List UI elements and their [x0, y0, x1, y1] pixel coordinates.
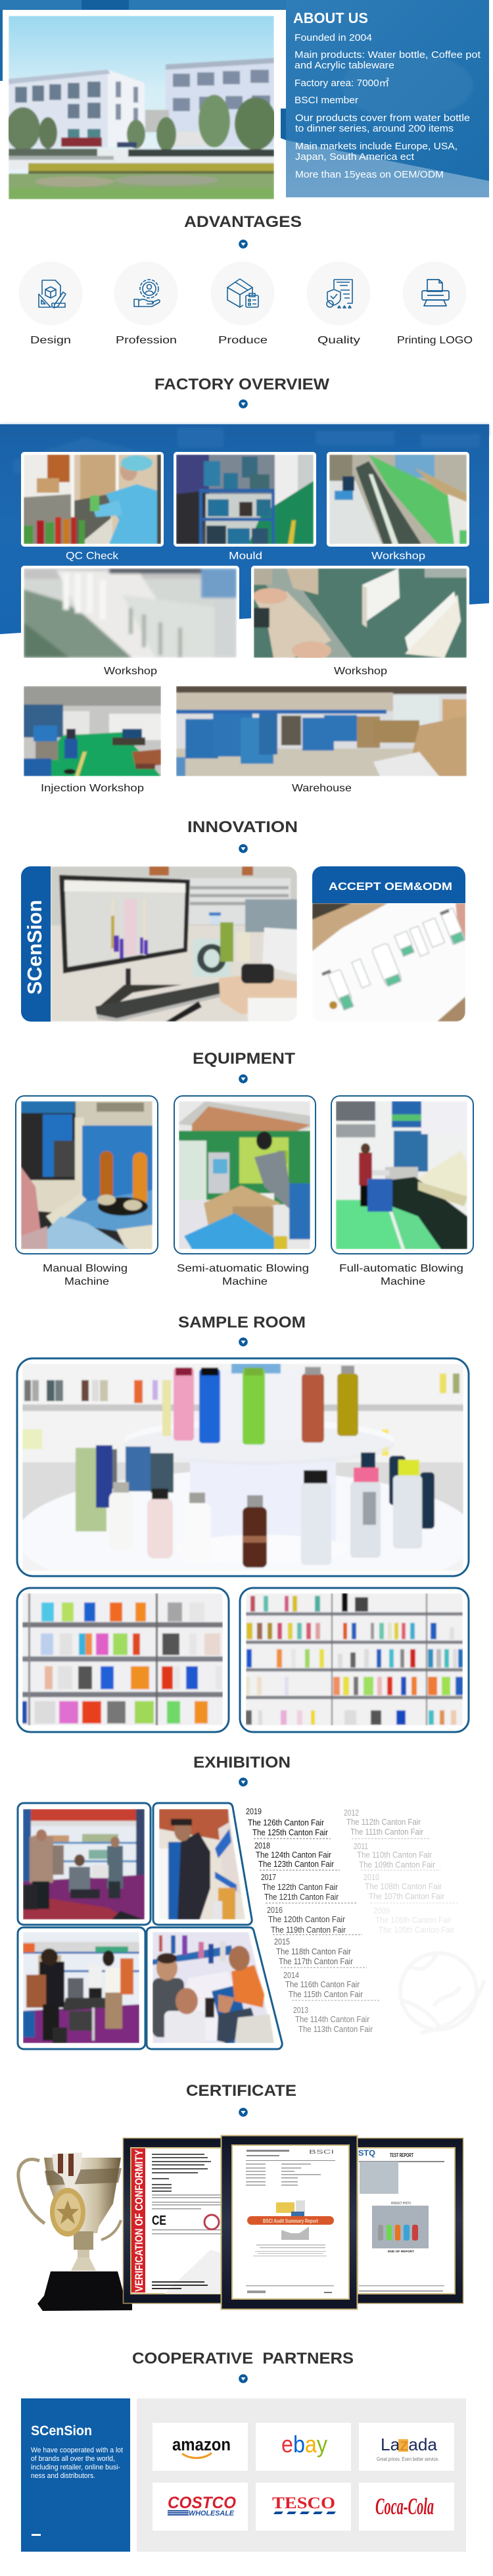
logo: amazon: amazon — [172, 2435, 231, 2454]
canton fair timeline: 2019 to 2013: The 121th Canton Fair — [264, 1892, 339, 1902]
label: qc check: QC Check — [66, 551, 119, 562]
label: semi-automatic blowing machine — [177, 1263, 309, 1287]
canton fair timeline: 2019 to 2013: 2013 — [293, 2005, 308, 2015]
section: exhibition — [18, 1754, 484, 2049]
canton fair timeline: 2019 to 2013: 2011 — [354, 1841, 368, 1851]
canton fair timeline: 2019 to 2013: The 115th Canton Fair — [289, 1989, 364, 1999]
label: full-automatic blowing machine: Machine — [381, 1276, 425, 1287]
equipment card: semi-automatic blowing machine — [174, 1096, 316, 1287]
canton fair timeline: 2019 to 2013: The 126th Canton Fair — [248, 1818, 325, 1827]
certificate: test report: PRODUCT PHOTO — [391, 2202, 411, 2206]
logo: lazada — [359, 2423, 454, 2471]
certificate: test report — [357, 2138, 463, 2304]
label: manual blowing machine: Manual Blowing — [43, 1263, 128, 1274]
section: innovation — [21, 818, 465, 1022]
logo: coca-cola: Coca-Cola — [375, 2493, 434, 2519]
heading: equipment: EQUIPMENT — [193, 1050, 295, 1068]
label: injection workshop: Injection Workshop — [41, 783, 144, 794]
card: design photo — [21, 866, 297, 1022]
certificate: bsci audit: BSCI — [309, 2149, 334, 2155]
canton fair timeline: 2019 to 2013: The 114th Canton Fair — [295, 2014, 370, 2024]
label: semi-automatic blowing machine: Semi-atuomatic Blowing — [177, 1263, 309, 1274]
card: accept oem odm — [312, 866, 465, 1022]
certificate: test report: STQ — [358, 2148, 375, 2158]
marker dot — [239, 1337, 248, 1347]
exhibition photo: seated discussion — [147, 1927, 282, 2049]
heading: innovation: INNOVATION — [187, 818, 298, 836]
canton fair timeline: 2019 to 2013: The 107th Canton Fair — [369, 1891, 445, 1901]
label: profession: Profession — [116, 335, 177, 346]
icon: quality — [306, 262, 371, 325]
about us text list — [294, 32, 481, 180]
label: warehouse: Warehouse — [292, 783, 352, 794]
blue factory background — [0, 424, 489, 634]
logo: costco wholesale: WHOLESALE — [189, 2510, 235, 2517]
section: cooperative partners — [21, 2350, 466, 2552]
panel: about us background — [281, 0, 489, 197]
icon: printing logo — [402, 262, 467, 325]
logo: costco wholesale: COSTCO — [168, 2494, 237, 2512]
canton fair timeline: 2019 to 2013: The 117th Canton Fair — [279, 1956, 354, 1966]
logo: lazada: Lazada — [381, 2435, 438, 2454]
canton fair timeline: 2019 to 2013: 2010 — [364, 1872, 379, 1882]
equipment card: full-automatic blowing machine — [331, 1096, 473, 1287]
heading: advantages: ADVANTAGES — [184, 213, 302, 231]
exhibition photo: booth meeting — [18, 1927, 145, 2049]
canton fair timeline: 2019 to 2013: The 123th Canton Fair — [258, 1859, 335, 1869]
canton fair timeline: 2019 to 2013: The 120th Canton Fair — [268, 1914, 346, 1924]
photo: bottle sketches — [312, 903, 465, 1022]
label: produce: Produce — [218, 335, 268, 346]
photo: qc check — [21, 452, 164, 547]
partner description: We have cooperated with a lot — [31, 2446, 123, 2454]
photo: warehouse — [176, 686, 467, 776]
label: manual blowing machine: Machine — [64, 1276, 109, 1287]
heading: cooperative partners: COOPERATIVE PARTNERS — [132, 2350, 354, 2367]
photo: workshop glassware — [21, 566, 239, 660]
canton fair timeline: 2019 to 2013: The 124th Canton Fair — [256, 1850, 332, 1860]
canton fair timeline: 2019 to 2013: The 125th Canton Fair — [252, 1827, 329, 1837]
panel: partner logos — [137, 2398, 466, 2552]
logo: amazon — [153, 2423, 248, 2471]
about us text list: More than 15yeas on OEM/ODM — [295, 169, 444, 180]
about us text list: and Acrylic tableware — [294, 60, 394, 71]
photo: factory building — [3, 10, 280, 204]
partner description: including retailer, online busi- — [31, 2464, 120, 2471]
section: certificate — [18, 2082, 463, 2311]
label: workshop: Workshop — [334, 666, 387, 677]
icon: design — [18, 262, 83, 325]
equipment card: manual blowing machine — [16, 1096, 158, 1287]
heading: about us: ABOUT US — [293, 10, 368, 26]
canton fair timeline: 2019 to 2013: The 119th Canton Fair — [271, 1925, 346, 1935]
photo: mould — [174, 452, 316, 547]
section: advantages — [18, 213, 473, 346]
about us text list: Our products cover from water bottle — [295, 112, 470, 124]
marker dot — [239, 239, 248, 249]
partner description: of brands all over the world, — [31, 2455, 115, 2463]
logo: ebay: ebay — [281, 2431, 327, 2458]
certificate: verification of conformity — [123, 2138, 223, 2304]
certificate: test report: END OF REPORT — [388, 2250, 414, 2253]
logo: scension: SCenSion — [31, 2423, 92, 2439]
section: sample room — [16, 1314, 476, 1732]
exhibition photo: visitor at shelves — [153, 1803, 252, 1925]
exhibition photo: booth one — [18, 1803, 151, 1925]
canton fair timeline: 2019 to 2013: The 105th Canton Fair — [379, 1925, 455, 1935]
canton fair timeline: 2019 to 2013: 2009 — [373, 1906, 390, 1916]
canton fair timeline: 2019 to 2013: 2012 — [344, 1808, 359, 1818]
partner description — [31, 2446, 123, 2480]
label: manual blowing machine — [43, 1263, 128, 1287]
sample photo: shelves right — [240, 1588, 469, 1732]
audit badge title: BSCI Audit Summary Report — [263, 2217, 318, 2224]
about us text list: Main markets include Europe, USA, — [295, 141, 458, 152]
marker dot — [239, 1777, 248, 1787]
label: quality: Quality — [317, 335, 360, 346]
canton fair timeline: 2019 to 2013 — [246, 1806, 458, 2034]
canton fair timeline: 2019 to 2013: The 108th Canton Fair — [365, 1881, 442, 1891]
canton fair timeline: 2019 to 2013: The 122th Canton Fair — [262, 1882, 339, 1892]
marker dot — [239, 2108, 248, 2117]
photo: workshop packaging — [251, 566, 469, 660]
vertical red-band title: VERIFICATION OF CONFORMITY — [133, 2149, 145, 2292]
logo: ebay — [256, 2423, 351, 2471]
heading: sample room: SAMPLE ROOM — [178, 1314, 306, 1331]
marker dot — [239, 1074, 248, 1083]
heading: exhibition: EXHIBITION — [193, 1754, 291, 1771]
canton fair timeline: 2019 to 2013: The 111th Canton Fair — [350, 1827, 424, 1837]
canton fair timeline: 2019 to 2013: The 109th Canton Fair — [359, 1860, 436, 1870]
hero: about us — [0, 0, 489, 204]
label: full-automatic blowing machine: Full-automatic Blowing — [339, 1263, 463, 1274]
canton fair timeline: 2019 to 2013: The 113th Canton Fair — [298, 2024, 373, 2034]
marker dot — [239, 399, 248, 409]
canton fair timeline: 2019 to 2013: The 112th Canton Fair — [346, 1817, 421, 1827]
canton fair timeline: 2019 to 2013: 2014 — [283, 1970, 299, 1980]
about us text list: to dinner series, around 200 items — [295, 123, 454, 134]
section: factory overview — [0, 376, 489, 794]
label: semi-automatic blowing machine: Machine — [222, 1276, 268, 1287]
canton fair timeline: 2019 to 2013: 2015 — [274, 1937, 290, 1946]
about us text list: Main products: Water bottle, Coffee pot — [294, 49, 481, 61]
logo: tesco: TESCO — [272, 2494, 335, 2512]
icon: produce — [210, 262, 275, 325]
about us text list: BSCI member — [294, 95, 358, 106]
logo: lazada: Great prices. Even better service. — [377, 2456, 439, 2462]
canton fair timeline: 2019 to 2013: The 116th Canton Fair — [285, 1979, 360, 1989]
marker dot — [239, 844, 248, 853]
about us text list: Founded in 2004 — [294, 32, 372, 43]
heading: certificate: CERTIFICATE — [186, 2082, 296, 2100]
certificate: bsci audit — [221, 2135, 358, 2310]
label: workshop: Workshop — [104, 666, 157, 677]
canton fair timeline: 2019 to 2013: The 106th Canton Fair — [375, 1915, 452, 1925]
marker dot — [239, 2374, 248, 2383]
label: full-automatic blowing machine — [339, 1263, 463, 1287]
partner description: ness and distributors. — [31, 2472, 95, 2480]
label: workshop: Workshop — [371, 551, 425, 562]
canton fair timeline: 2019 to 2013: 2016 — [267, 1905, 283, 1915]
canton fair timeline: 2019 to 2013: 2017 — [261, 1872, 276, 1882]
canton fair timeline: 2019 to 2013: The 110th Canton Fair — [357, 1850, 433, 1860]
logo: costco wholesale — [153, 2483, 248, 2531]
logo: scension vertical: SCenSion — [23, 900, 46, 995]
about us text list: Japan, South America ect — [295, 151, 415, 162]
section: equipment — [16, 1050, 473, 1287]
logo: tesco — [256, 2483, 351, 2531]
photo: workshop bottles — [327, 452, 469, 547]
icon: faint globe — [400, 1953, 484, 2033]
sample photo: display table — [16, 1358, 476, 1602]
label: mould: Mould — [229, 551, 262, 562]
label: printing logo: Printing LOGO — [397, 335, 473, 346]
certificate: verification of conformity: CE — [152, 2214, 166, 2228]
label: design: Design — [30, 335, 71, 346]
test report title: TEST REPORT — [390, 2152, 413, 2158]
heading: factory overview: FACTORY OVERVIEW — [154, 376, 329, 393]
panel: partner intro — [21, 2398, 130, 2552]
logo: coca-cola — [359, 2483, 454, 2531]
canton fair timeline: 2019 to 2013: 2019 — [246, 1806, 262, 1816]
sample photo: shelves left — [17, 1588, 229, 1732]
heading: accept oem&odm: ACCEPT OEM&ODM — [329, 880, 452, 893]
icon: profession — [114, 262, 177, 325]
about us text list: Factory area: 7000㎡ — [294, 78, 389, 89]
photo: injection workshop — [24, 686, 161, 776]
canton fair timeline: 2019 to 2013: The 118th Canton Fair — [276, 1946, 352, 1956]
trophy — [18, 2152, 132, 2311]
canton fair timeline: 2019 to 2013: 2018 — [254, 1841, 270, 1850]
